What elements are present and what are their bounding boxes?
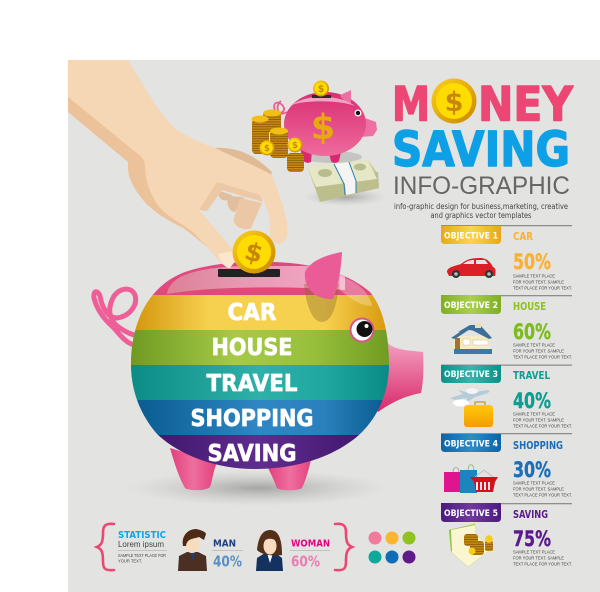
panel: objective 5 saving: TEXT PLACE FOR YOUR TEXT. xyxy=(513,562,572,566)
panel: objective 5 saving: FOR YOUR TEXT. SAMPLE xyxy=(513,556,564,560)
panel: objective 1 car: SAMPLE TEXT PLACE xyxy=(513,274,555,278)
panel: objective 4 shopping xyxy=(441,433,572,498)
objective 3 tab: OBJECTIVE 3 xyxy=(444,370,498,380)
pig eye xyxy=(350,318,374,342)
panel: objective 2 house: HOUSE xyxy=(513,300,546,313)
panel: objective 5 saving: SAVING xyxy=(513,508,548,521)
objective 2 tab: OBJECTIVE 2 xyxy=(444,301,498,311)
illustration: hand dropping coin xyxy=(68,60,287,268)
icon: car xyxy=(447,258,496,278)
title coin: $ xyxy=(445,87,463,118)
pig body with stripes xyxy=(131,260,391,470)
panel: objective 4 shopping: SHOPPING xyxy=(513,439,563,452)
panel: objective 2 house: SAMPLE TEXT PLACE xyxy=(513,342,555,348)
panel: objective 3 travel: TEXT PLACE FOR YOUR TEXT. xyxy=(513,424,572,428)
icon: shopping bags and basket xyxy=(444,465,498,493)
coin slot xyxy=(218,269,280,277)
icon: plane and suitcase xyxy=(450,388,493,427)
panel: objective 3 travel: TRAVEL xyxy=(513,369,550,382)
panel: objective 4 shopping: SAMPLE TEXT PLACE xyxy=(513,480,555,486)
panel: objective 2 house: FOR YOUR TEXT. SAMPLE xyxy=(513,348,564,354)
panel: objective 4 shopping: 30% xyxy=(513,458,551,482)
pig ear xyxy=(305,252,342,299)
panel: objective 1 car: FOR YOUR TEXT. SAMPLE xyxy=(513,280,564,284)
icon: man xyxy=(178,529,207,571)
icon: cash stack xyxy=(303,160,387,206)
title coin xyxy=(432,78,476,124)
subtitle: and graphics vector templates xyxy=(430,211,532,220)
panel: objective 3 travel xyxy=(441,364,572,428)
title xyxy=(392,78,574,220)
panel: objective 3 travel: 40% xyxy=(513,389,551,413)
panel: statistic xyxy=(97,524,352,571)
illustration: large rainbow piggy bank xyxy=(94,252,423,490)
pig snout xyxy=(372,340,423,412)
right brace xyxy=(335,524,352,570)
icon: main gold coin xyxy=(232,230,276,274)
subtitle: info-graphic design for business,marketing, creative xyxy=(394,202,568,211)
illustration: small piggy bank with coins and cash xyxy=(252,80,387,206)
panel: objective 3 travel: SAMPLE TEXT PLACE xyxy=(513,412,555,416)
left brace xyxy=(97,524,114,570)
man label: MAN xyxy=(213,538,236,550)
panel: objective 4 shopping: FOR YOUR TEXT. SAMPLE xyxy=(513,486,564,492)
icon: wallet with coins xyxy=(449,524,493,567)
icon: coin stacks xyxy=(252,110,304,172)
icon: woman xyxy=(256,530,283,571)
icon: coin stacks: $ xyxy=(264,144,270,154)
lorem ipsum: Lorem ipsum xyxy=(118,540,164,549)
statistic heading: STATISTIC xyxy=(118,530,166,541)
title: MONEY xyxy=(392,78,574,132)
woman label xyxy=(290,538,330,570)
shadow under large pig xyxy=(126,470,390,506)
subtitle xyxy=(394,202,568,220)
panel: objective 4 shopping: TEXT PLACE FOR YOUR TEXT. xyxy=(513,492,572,498)
pig tail xyxy=(94,289,136,345)
pig stripe labels xyxy=(190,298,314,467)
panel: objective 1 car: 50% xyxy=(513,250,551,274)
colour dots xyxy=(368,532,416,564)
statistic note: YOUR TEXT. xyxy=(118,558,142,564)
panel: objective 2 house: 60% xyxy=(513,320,551,344)
panel: objective 5 saving: 75% xyxy=(513,527,551,551)
title: INFO-GRAPHIC: INFO-GRAPHIC xyxy=(393,172,570,200)
background panel xyxy=(68,60,600,592)
panel: objective 3 travel: FOR YOUR TEXT. SAMPLE xyxy=(513,418,564,422)
man label: 40% xyxy=(213,552,242,570)
title: SAVING: SAVING xyxy=(392,122,570,178)
panel: objective 5 saving: SAMPLE TEXT PLACE xyxy=(513,550,555,554)
woman label: 60% xyxy=(291,552,320,570)
icon: main gold coin: $ xyxy=(242,236,266,269)
panel: objective 1 car: CAR xyxy=(513,230,533,243)
woman label: WOMAN xyxy=(291,538,330,550)
icon: house xyxy=(451,323,492,354)
pig stripe labels: TRAVEL xyxy=(206,369,298,397)
statistic note: SAMPLE TEXT PLACE FOR xyxy=(118,553,166,558)
title: MONEY: NEY xyxy=(478,78,574,132)
statistic note xyxy=(118,553,166,564)
icon: small pig: $ xyxy=(311,108,335,148)
objective 5 tab: OBJECTIVE 5 xyxy=(444,509,498,519)
pig legs xyxy=(170,448,313,490)
pig stripe labels: HOUSE xyxy=(212,333,292,361)
pig stripe labels: SAVING xyxy=(208,439,296,467)
objective 4 tab: OBJECTIVE 4 xyxy=(444,440,498,450)
panel: objective 1 car: TEXT PLACE FOR YOUR TEXT. xyxy=(513,286,572,290)
man label xyxy=(212,538,243,570)
title: MONEY: O xyxy=(436,78,472,132)
panel: objective 1 car xyxy=(441,225,572,290)
pig stripe labels: CAR xyxy=(228,298,276,326)
panel: objective 5 saving xyxy=(441,503,572,567)
icon: coin above small pig: $ xyxy=(318,84,324,95)
pig stripe labels: SHOPPING xyxy=(190,404,314,432)
title: MONEY: M xyxy=(392,78,430,132)
panel: objective 2 house: TEXT PLACE FOR YOUR TEXT. xyxy=(513,354,572,360)
panel: objective 2 house xyxy=(441,295,572,360)
objective 1 tab: OBJECTIVE 1 xyxy=(444,232,498,242)
icon: coin stacks: $ xyxy=(292,141,298,151)
